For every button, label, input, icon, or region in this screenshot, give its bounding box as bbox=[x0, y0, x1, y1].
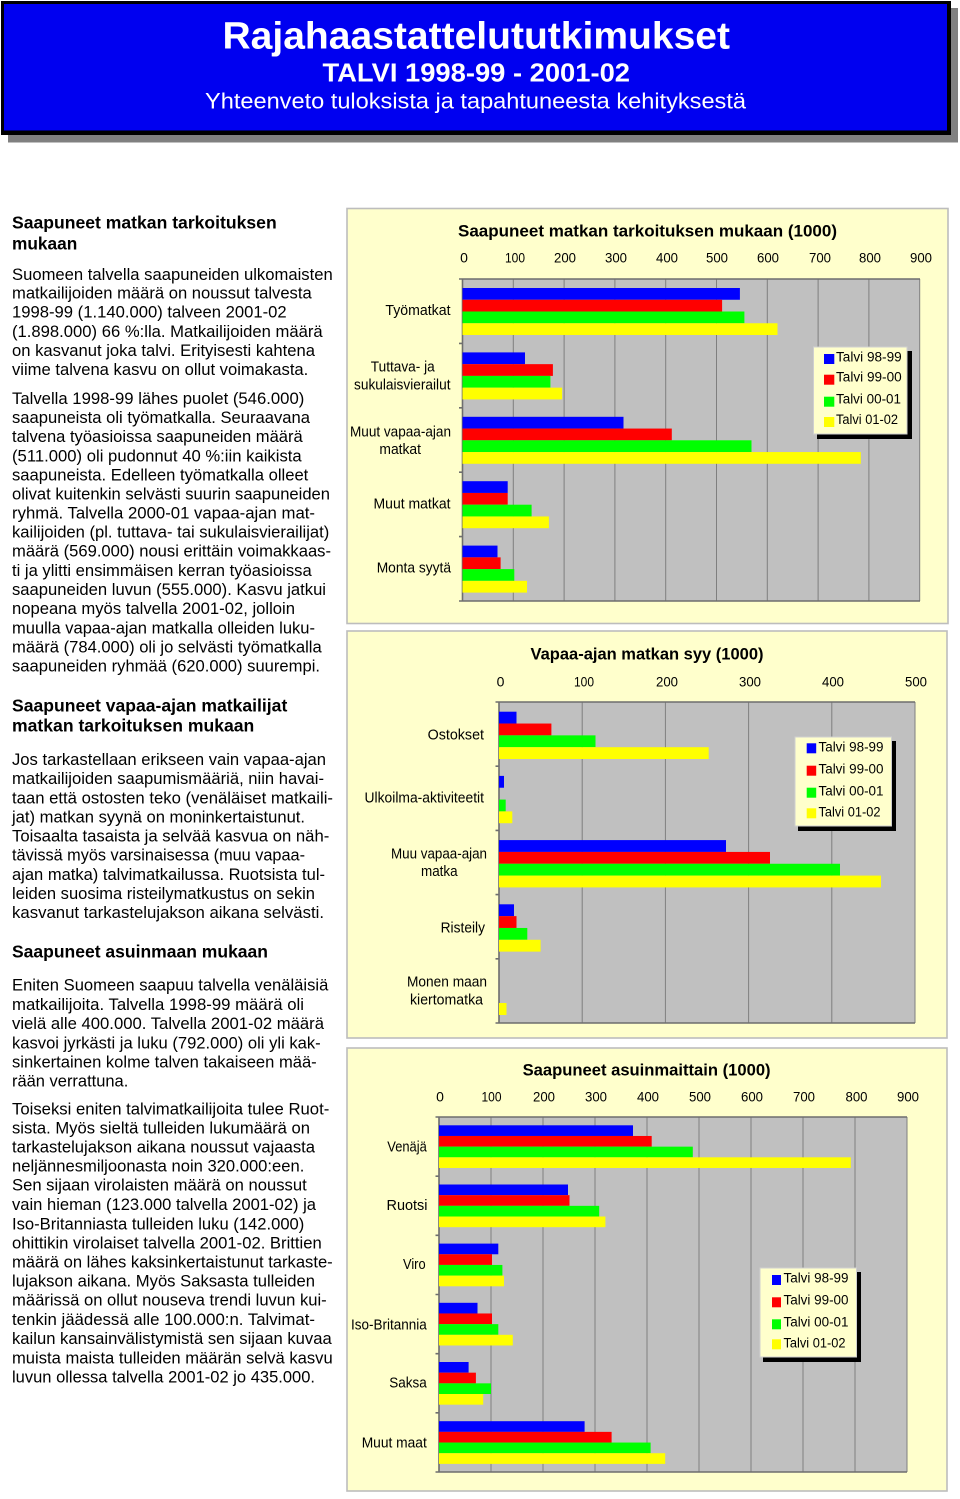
category labels: Ostokset bbox=[428, 727, 484, 743]
heading: purpose of trip: Saapuneet matkan tarkoituksen bbox=[12, 212, 277, 232]
text block: other countries: määrissä on ollut nouseva trendi luvun kui- bbox=[12, 1292, 327, 1310]
text block: leisure travellers: Toisaalta tasaista ja selvää kasvua on näh- bbox=[12, 828, 329, 846]
text block: work trips and leisure: saapuneiden ryhmää (620.000) suurempi. bbox=[12, 658, 320, 676]
text block: other countries: kailun kansainvälistymistä sen sijaan kuvaa bbox=[12, 1330, 333, 1348]
category labels: Viro bbox=[403, 1257, 426, 1273]
text block: other countries: luvun ollessa talvella 2001-02 jo 435.000. bbox=[12, 1369, 315, 1387]
bars: Tuttava- ja sukulaisvierailut bbox=[462, 352, 562, 399]
category labels: sukulaisvierailut bbox=[354, 377, 451, 393]
legend: Talvi 99-00 bbox=[784, 1292, 848, 1307]
chart title: Saapuneet asuinmaittain (1000) bbox=[523, 1062, 771, 1080]
x axis labels bbox=[460, 250, 932, 266]
category labels: matka bbox=[421, 864, 458, 880]
text block: work trips and leisure: (511.000) oli pudonnut 40 %:iin kaikista bbox=[12, 447, 303, 465]
x axis labels bbox=[436, 1089, 919, 1105]
category labels: Iso-Britannia bbox=[351, 1317, 427, 1333]
x axis labels: 0 bbox=[436, 1089, 444, 1105]
text block: overall arrivals: Suomeen talvella saapuneiden ulkomaisten bbox=[12, 266, 333, 284]
text block: other countries: tenkin jäädessä alle 100.000:n. Talvimat- bbox=[12, 1311, 315, 1329]
category labels: Monen maan bbox=[407, 975, 487, 991]
text block: Russia: matkailijoita. Talvella 1998-99 määrä oli bbox=[12, 996, 304, 1014]
x axis labels: 300 bbox=[739, 674, 761, 690]
x axis labels: 700 bbox=[793, 1089, 815, 1105]
x axis labels: 200 bbox=[554, 250, 576, 266]
text block: other countries: sista. Myös sieltä tulleiden lukumäärä on bbox=[12, 1120, 310, 1138]
bars: Risteily bbox=[499, 904, 541, 952]
x axis labels: 200 bbox=[656, 674, 678, 690]
heading: purpose of trip bbox=[12, 212, 277, 254]
text block: other countries: määrä on lähes kaksinkertaistunut tarkaste- bbox=[12, 1253, 333, 1271]
bars: Ulkoilma-aktiviteetit bbox=[499, 776, 512, 823]
category labels: Muut vapaa-ajan bbox=[350, 425, 451, 441]
text block: other countries: vain hieman (123.000 talvella 2001-02) ja bbox=[12, 1196, 317, 1214]
x axis labels: 100 bbox=[574, 674, 594, 690]
x axis labels: 400 bbox=[822, 674, 844, 690]
heading: purpose of trip: mukaan bbox=[12, 234, 77, 254]
text block: Russia: rään verrattuna. bbox=[12, 1072, 128, 1090]
text block: work trips and leisure: kailijoiden (pl. tuttava- tai sukulaisvierailijat) bbox=[12, 524, 329, 542]
bars: Muut maat bbox=[439, 1421, 665, 1464]
category labels: kiertomatka bbox=[410, 992, 483, 1008]
text block: Russia: vielä alle 400.000. Talvella 2001-02 määrä bbox=[12, 1015, 325, 1033]
text block: leisure travellers: jat) matkan syynä on moninkertaistunut. bbox=[11, 809, 305, 827]
legend: Talvi 98-99 bbox=[836, 350, 902, 365]
chart title: Vapaa-ajan matkan syy (1000) bbox=[530, 645, 764, 663]
legend: Talvi 01-02 bbox=[836, 412, 898, 427]
x axis labels: 800 bbox=[846, 1089, 868, 1105]
bars: Muu vapaa-ajan matka bbox=[499, 840, 881, 887]
text block: Russia: Eniten Suomeen saapuu talvella venäläisiä bbox=[12, 977, 329, 995]
category labels: Monta syytä bbox=[377, 561, 451, 577]
text block: Russia: kasvoi jyrkästi ja luku (792.000) oli yli kak- bbox=[12, 1034, 321, 1052]
x axis labels: 800 bbox=[859, 250, 881, 266]
text block: Russia: sinkertainen kolme talven takaiseen mää- bbox=[12, 1054, 317, 1072]
text block: other countries: tarkastelujakson aikana noussut vajaasta bbox=[12, 1138, 316, 1156]
bars: Muut vapaa-ajan matkat bbox=[462, 417, 861, 464]
text block: overall arrivals: on kasvanut joka talvi. Erityisesti kahtena bbox=[12, 342, 316, 360]
text block: other countries: Toiseksi eniten talvimatkailijoita tulee Ruot- bbox=[12, 1100, 329, 1118]
legend: Talvi 00-01 bbox=[784, 1315, 848, 1330]
category labels: Venäjä bbox=[387, 1140, 427, 1156]
text block: leisure travellers: kasvanut tarkastelujakson aikana selvästi. bbox=[12, 904, 324, 922]
text block: other countries: Sen sijaan virolaisten määrä on noussut bbox=[12, 1177, 307, 1195]
category labels: Muut maat bbox=[362, 1435, 427, 1451]
x axis labels: 600 bbox=[757, 250, 779, 266]
text block: overall arrivals bbox=[12, 266, 333, 379]
category labels: Muu vapaa-ajan bbox=[391, 846, 487, 862]
category labels: Tuttava- ja bbox=[371, 360, 435, 376]
text block: overall arrivals: matkailijoiden määrä on noussut talvesta bbox=[12, 284, 313, 302]
chart title: Saapuneet matkan tarkoituksen mukaan (1000) bbox=[458, 223, 837, 241]
text block: other countries: Iso-Britanniasta tulleiden luku (142.000) bbox=[12, 1215, 304, 1233]
x axis labels: 500 bbox=[706, 250, 728, 266]
category labels: matkat bbox=[379, 442, 421, 458]
text block: work trips and leisure: nopeana myös talvella 2001-02, jolloin bbox=[12, 600, 295, 618]
x axis labels: 300 bbox=[585, 1089, 607, 1105]
text block: work trips and leisure: Talvella 1998-99 lähes puolet (546.000) bbox=[12, 390, 304, 408]
category labels: Ulkoilma-aktiviteetit bbox=[364, 791, 484, 807]
x axis labels: 200 bbox=[533, 1089, 555, 1105]
legend: Talvi 01-02 bbox=[784, 1335, 846, 1350]
legend bbox=[814, 347, 912, 439]
category labels: Työmatkat bbox=[385, 303, 451, 319]
text block: other countries: muista maista tulleiden määrän selvä kasvu bbox=[12, 1349, 333, 1367]
text block: leisure travellers: ajan matka) talvimatkailussa. Ruotsista tul- bbox=[12, 866, 325, 884]
x axis labels bbox=[497, 674, 927, 690]
text block: other countries: ohittikin virolaiset talvella 2001-02. Brittien bbox=[12, 1234, 322, 1252]
plot area bbox=[496, 702, 915, 1023]
plot area bbox=[459, 279, 920, 601]
text block: overall arrivals: (1.898.000) 66 %:lla. Matkailijoiden määrä bbox=[12, 323, 324, 341]
text block: overall arrivals: viime talvena kasvu on ollut voimakasta. bbox=[12, 361, 308, 379]
bars: Iso-Britannia bbox=[439, 1303, 513, 1345]
text block: work trips and leisure: määrä (784.000) oli jo selvästi työmatkalla bbox=[12, 639, 323, 657]
bars: Viro bbox=[439, 1244, 504, 1286]
x axis labels: 900 bbox=[897, 1089, 919, 1105]
bars: Saksa bbox=[439, 1362, 491, 1405]
x axis labels: 700 bbox=[809, 250, 831, 266]
heading: leisure travellers bbox=[12, 696, 287, 736]
x axis labels: 600 bbox=[741, 1089, 763, 1105]
text block: work trips and leisure: saapuneista oli työmatkalla. Seuraavana bbox=[12, 409, 311, 427]
text block: work trips and leisure: muulla vapaa-ajan matkalla olleiden luku- bbox=[12, 619, 315, 637]
text block: leisure travellers bbox=[11, 751, 333, 922]
legend: Talvi 98-99 bbox=[784, 1270, 848, 1285]
bars: Monen maan kiertomatka bbox=[499, 1003, 506, 1015]
text block: work trips and leisure: määrä (569.000) nousi erittäin voimakkaas- bbox=[12, 543, 331, 561]
legend: Talvi 98-99 bbox=[818, 740, 884, 755]
x axis labels: 0 bbox=[497, 674, 505, 690]
text block: work trips and leisure: talvena työasioissa saapuneiden määrä bbox=[12, 428, 304, 446]
heading: leisure travellers: Saapuneet vapaa-ajan matkailijat bbox=[12, 696, 287, 716]
legend bbox=[760, 1268, 861, 1362]
legend: Talvi 01-02 bbox=[818, 805, 880, 820]
bars: Työmatkat bbox=[462, 288, 778, 335]
text block: work trips and leisure bbox=[12, 390, 331, 676]
panel: leisure trip reason chart bbox=[347, 631, 947, 1038]
text block: work trips and leisure: saapuneiden luvun (555.000). Kasvu jatkui bbox=[12, 581, 326, 599]
x axis labels: 500 bbox=[689, 1089, 711, 1105]
legend: Talvi 99-00 bbox=[836, 370, 902, 385]
bars: Muut matkat bbox=[462, 481, 549, 528]
heading: leisure travellers: matkan tarkoituksen mukaan bbox=[12, 716, 254, 736]
legend: Talvi 99-00 bbox=[818, 761, 884, 776]
panel: arrivals by purpose chart bbox=[347, 208, 948, 624]
legend: Talvi 00-01 bbox=[836, 391, 901, 406]
x axis labels: 100 bbox=[505, 250, 525, 266]
x axis labels: 0 bbox=[460, 250, 468, 266]
bars: Monta syytä bbox=[462, 546, 527, 593]
title: Rajahaastattelututkimukset bbox=[222, 15, 730, 57]
bars: Ostokset bbox=[499, 712, 709, 759]
text block: Russia bbox=[12, 977, 329, 1090]
panel: arrivals by country chart bbox=[347, 1048, 947, 1491]
category labels bbox=[351, 1140, 428, 1451]
text block: leisure travellers: taan että ostosten teko (venäläiset matkaili- bbox=[12, 789, 333, 807]
subtitle: summary: Yhteenveto tuloksista ja tapahtuneesta kehityksestä bbox=[205, 88, 747, 113]
text block: other countries: neljännesmiljoonasta noin 320.000:een. bbox=[12, 1158, 304, 1176]
text block: leisure travellers: tävissä myös varsinaisessa (muu vapaa- bbox=[12, 847, 305, 865]
text block: work trips and leisure: saapuneista. Edelleen työmatkalla olleet bbox=[12, 466, 309, 484]
text block: work trips and leisure: ryhmä. Talvella 2000-01 vapaa-ajan mat- bbox=[12, 505, 315, 523]
text block: leisure travellers: leiden suosima risteilymatkustus on sekin bbox=[12, 885, 315, 903]
bars: Ruotsi bbox=[439, 1184, 605, 1227]
category labels: Muut matkat bbox=[374, 496, 451, 512]
x axis labels: 400 bbox=[637, 1089, 659, 1105]
text block: other countries bbox=[12, 1100, 333, 1387]
category labels bbox=[364, 727, 487, 1008]
category labels: Saksa bbox=[389, 1376, 427, 1392]
subtitle: period: TALVI 1998-99 - 2001-02 bbox=[322, 58, 630, 88]
x axis labels: 100 bbox=[482, 1089, 502, 1105]
x axis labels: 500 bbox=[905, 674, 927, 690]
category labels: Risteily bbox=[441, 920, 486, 936]
text block: overall arrivals: 1998-99 (1.140.000) talveen 2001-02 bbox=[12, 303, 287, 321]
bars: Venäjä bbox=[439, 1125, 851, 1168]
text block: other countries: lujakson aikana. Myös Saksasta tulleiden bbox=[12, 1273, 315, 1291]
legend: Talvi 00-01 bbox=[818, 784, 884, 799]
heading: country of residence: Saapuneet asuinmaan mukaan bbox=[12, 941, 268, 961]
category labels: Ruotsi bbox=[386, 1198, 428, 1214]
text block: work trips and leisure: olivat kuitenkin selvästi suurin saapuneiden bbox=[12, 486, 330, 504]
x axis labels: 400 bbox=[656, 250, 678, 266]
category labels bbox=[350, 303, 451, 577]
x axis labels: 900 bbox=[910, 250, 932, 266]
x axis labels: 300 bbox=[605, 250, 627, 266]
plot area bbox=[436, 1117, 907, 1472]
legend bbox=[795, 737, 896, 831]
text block: leisure travellers: Jos tarkastellaan erikseen vain vapaa-ajan bbox=[12, 751, 326, 769]
header banner bbox=[1, 1, 958, 142]
text block: work trips and leisure: ti ja ylitti ensimmäisen kerran työasioissa bbox=[12, 562, 313, 580]
text block: leisure travellers: matkailijoiden saapumismääriä, niin havai- bbox=[12, 770, 324, 788]
